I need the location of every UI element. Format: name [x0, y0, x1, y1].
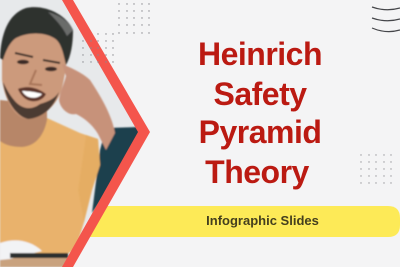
dot grid: right	[360, 154, 392, 184]
neck	[0, 100, 47, 147]
banner label: Infographic Slides	[206, 213, 319, 228]
laptop	[91, 126, 138, 214]
panel: photo of smiling man	[0, 0, 150, 267]
shirt	[0, 118, 100, 255]
wavy lines icon	[372, 7, 400, 32]
title	[198, 36, 322, 190]
title: Pyramid	[199, 114, 321, 150]
hand and arm	[59, 64, 115, 150]
table	[0, 258, 70, 267]
eyes	[17, 60, 29, 64]
face	[2, 27, 66, 119]
red chevron	[62, 0, 150, 267]
smile	[18, 87, 46, 101]
beard	[3, 82, 59, 119]
sleeve	[78, 135, 100, 222]
title: Theory	[205, 154, 309, 190]
nose shadow	[30, 70, 42, 85]
book	[0, 240, 42, 260]
title: Heinrich	[198, 36, 322, 72]
yellow banner	[83, 206, 400, 237]
hair	[0, 7, 73, 65]
dot grid: over photo	[82, 33, 114, 63]
title: Safety	[213, 76, 307, 112]
dot grid: top	[118, 3, 150, 34]
